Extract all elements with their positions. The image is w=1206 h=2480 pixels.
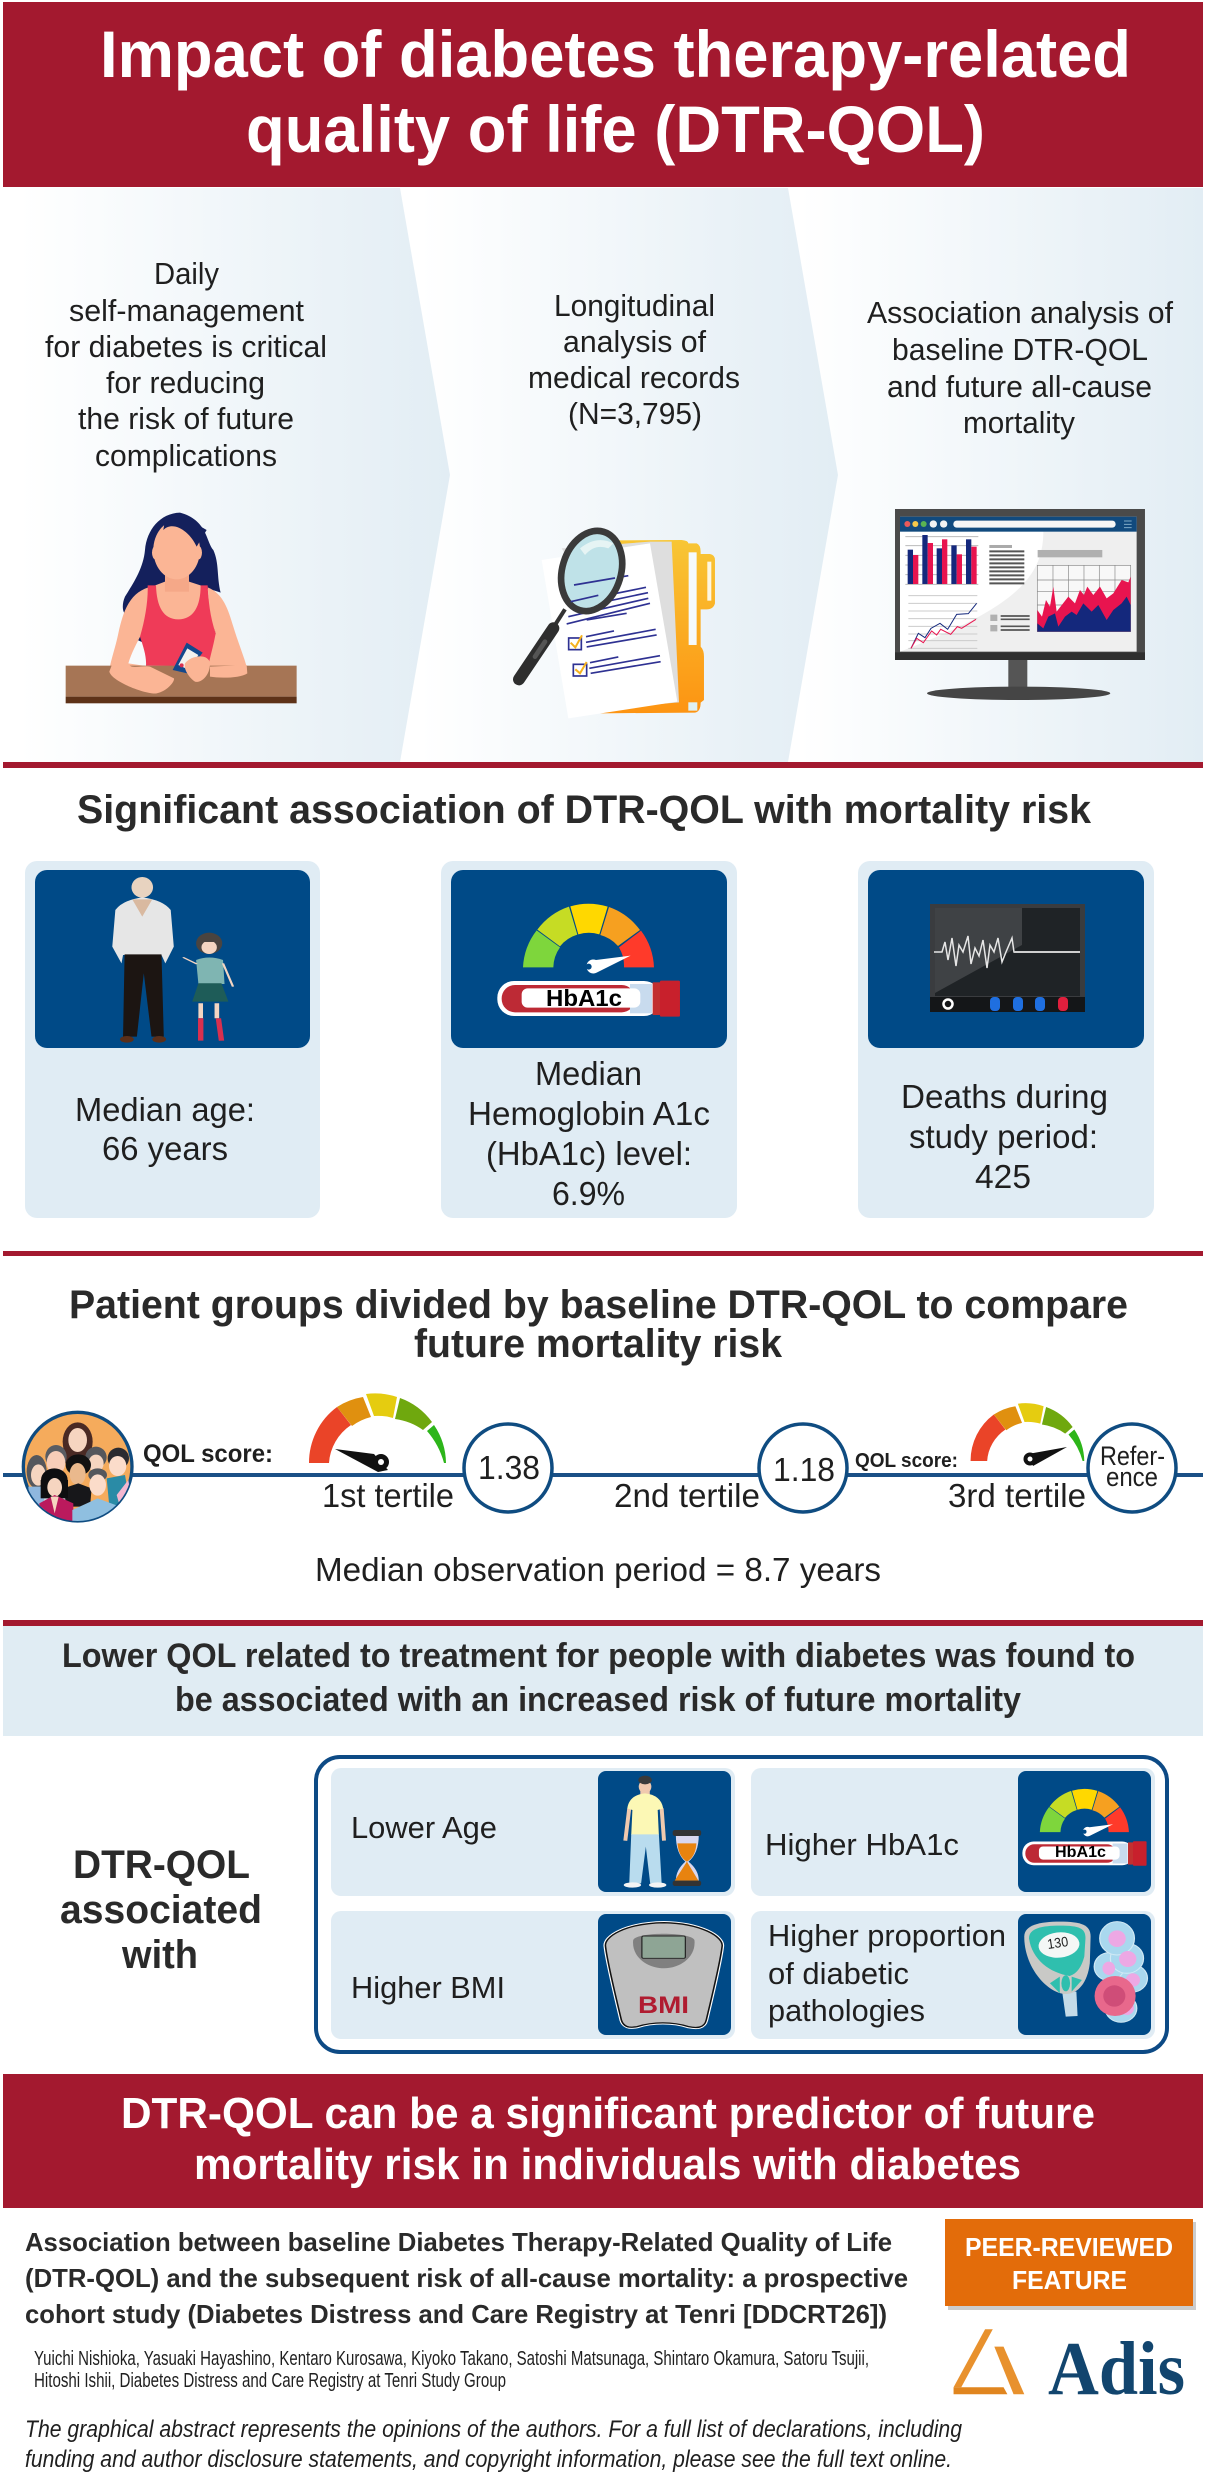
panel: key finding band xyxy=(3,1626,1203,1736)
icon: person and hourglass xyxy=(624,1776,701,1888)
text: article citation: Association between baseline Diabetes Therapy-Related Quality of Life xyxy=(25,2227,892,2257)
text: article citation: cohort study (Diabetes Distress and Care Registry at Tenri [DDCRT26]) xyxy=(25,2299,887,2329)
cell: diabetic pathologies xyxy=(751,1911,1155,2039)
text: association analysis xyxy=(867,295,1173,440)
circle: hazard ratio 1.18 xyxy=(759,1424,847,1512)
label: QOL score left: QOL score: xyxy=(143,1440,273,1468)
text: longitudinal analysis: medical records xyxy=(528,360,740,395)
circle: reference xyxy=(1088,1424,1176,1512)
heading: significant association: Significant association of DTR-QOL with mortality risk xyxy=(77,788,1092,832)
section divider xyxy=(3,1620,1203,1626)
text: association analysis: Association analysis of xyxy=(867,295,1173,330)
label: meter reading: 130 xyxy=(1046,1933,1069,1952)
panel: study overview chevrons xyxy=(3,188,1203,762)
badge: peer-reviewed feature: FEATURE xyxy=(1012,2265,1127,2295)
panel: median HbA1c card xyxy=(441,861,737,1218)
badge: peer-reviewed feature: PEER-REVIEWED xyxy=(965,2232,1173,2262)
cell: diabetic pathologies: of diabetic xyxy=(768,1956,909,1991)
text: median hemoglobin: (HbA1c) level: xyxy=(486,1136,692,1173)
heading: patient groups: Patient groups divided by baseline DTR-QOL to compare xyxy=(69,1283,1128,1327)
text: longitudinal analysis: (N=3,795) xyxy=(568,396,702,431)
text: longitudinal analysis xyxy=(528,288,740,431)
text: daily self-management: Daily xyxy=(154,256,219,291)
panel: key finding band: Lower QOL related to treatment for people with diabetes was found to xyxy=(62,1637,1135,1675)
text: median hemoglobin: Median xyxy=(535,1056,642,1093)
cell: lower age: Lower Age xyxy=(351,1810,497,1845)
icon: gauge needle low xyxy=(335,1449,389,1472)
conclusion banner xyxy=(3,2074,1203,2208)
text: association analysis: and future all-cause xyxy=(887,369,1152,404)
text: article citation xyxy=(25,2227,908,2329)
text: disclaimer: funding and author disclosure statements, and copyright information, please see the full text online. xyxy=(25,2446,952,2473)
text: median hemoglobin: Hemoglobin A1c xyxy=(468,1096,710,1133)
circle: reference: Refer- xyxy=(1100,1441,1165,1471)
text: median hemoglobin xyxy=(468,1056,710,1213)
text: authors xyxy=(34,2348,869,2392)
icon: BMI scale xyxy=(605,1923,722,2028)
text: DTR-QOL associated with xyxy=(60,1843,262,1977)
icon: glucose meter and cells xyxy=(1024,1922,1147,2022)
text: median age: Median age: xyxy=(75,1092,255,1129)
text: association analysis: mortality xyxy=(963,405,1075,440)
circle: hazard ratio 1.38: 1.38 xyxy=(478,1450,540,1487)
text: median hemoglobin: 6.9% xyxy=(552,1176,625,1213)
text: daily self-management: complications xyxy=(95,438,277,473)
cell: higher HbA1c: Higher HbA1c xyxy=(765,1827,959,1862)
chart: tertile timeline xyxy=(3,1393,1203,1523)
label: QOL score right: QOL score: xyxy=(855,1450,958,1472)
circle: hazard ratio 1.18: 1.18 xyxy=(773,1452,835,1489)
section divider xyxy=(3,1251,1203,1256)
text: daily self-management: the risk of future xyxy=(78,401,294,436)
panel: key finding band: be associated with an increased risk of future mortality xyxy=(175,1681,1021,1719)
text: DTR-QOL associated with: with xyxy=(121,1933,198,1977)
text: daily self-management: self-management xyxy=(69,293,304,328)
text: DTR-QOL associated with: DTR-QOL xyxy=(73,1843,250,1887)
label: small HbA1c on tube: HbA1c xyxy=(1055,1844,1106,1861)
circle: reference: ence xyxy=(1106,1462,1158,1492)
icon: heart rate monitor xyxy=(930,904,1085,1012)
panel: associated factors xyxy=(316,1757,1167,2052)
label: 2nd tertile: 2nd tertile xyxy=(614,1478,760,1515)
text: daily self-management: for diabetes is critical xyxy=(45,329,327,364)
conclusion banner: mortality risk in individuals with diabetes xyxy=(194,2140,1021,2189)
title banner: quality of life (DTR-QOL) xyxy=(246,92,985,166)
text: disclaimer xyxy=(25,2416,963,2473)
text: deaths during study: study period: xyxy=(909,1119,1098,1156)
icon: HbA1c gauge and blood tube xyxy=(497,904,680,1017)
text: article citation: (DTR-QOL) and the subsequent risk of all-cause mortality: a prospective xyxy=(25,2263,908,2293)
icon: older man and child xyxy=(112,877,233,1043)
icon: gauge needle high xyxy=(1024,1447,1067,1466)
text: authors: Yuichi Nishioka, Yasuaki Hayashino, Kentaro Kurosawa, Kiyoko Takano, Satoshi Matsunaga, Shintaro Okamura, Satoru Tsujii, xyxy=(34,2348,869,2370)
cell: higher BMI xyxy=(331,1911,735,2039)
logo: Adis: Adis xyxy=(1048,2327,1185,2411)
cell: higher BMI: Higher BMI xyxy=(351,1970,505,2005)
cell: lower age xyxy=(331,1768,735,1896)
icon: woman testing blood glucose xyxy=(66,513,297,703)
icon: small HbA1c gauge xyxy=(1022,1789,1147,1866)
text: deaths during study: 425 xyxy=(975,1159,1031,1196)
cell: higher HbA1c xyxy=(751,1768,1155,1896)
text: median age: 66 years xyxy=(102,1131,228,1168)
text: DTR-QOL associated with: associated xyxy=(60,1888,262,1932)
section divider xyxy=(3,762,1203,768)
label: HbA1c on tube: HbA1c xyxy=(546,985,622,1011)
text: longitudinal analysis: Longitudinal xyxy=(554,288,715,323)
text: authors: Hitoshi Ishii, Diabetes Distress and Care Registry at Tenri Study Group xyxy=(34,2370,506,2392)
text: disclaimer: The graphical abstract represents the opinions of the authors. For a full list of declarations, including xyxy=(25,2416,963,2443)
heading: patient groups xyxy=(69,1283,1128,1366)
heading: patient groups: future mortality risk xyxy=(414,1322,783,1366)
panel: median age card xyxy=(25,861,320,1218)
text: longitudinal analysis: analysis of xyxy=(563,324,706,359)
title banner xyxy=(3,2,1203,187)
circle: hazard ratio 1.38 xyxy=(464,1424,552,1512)
cell: diabetic pathologies: pathologies xyxy=(768,1993,925,2028)
icon: documents and magnifier xyxy=(519,523,715,718)
text: deaths during study xyxy=(901,1079,1108,1196)
icon: computer monitor with charts xyxy=(895,509,1145,700)
label: 3rd tertile: 3rd tertile xyxy=(948,1478,1086,1515)
text: median observation period: Median observation period = 8.7 years xyxy=(315,1552,881,1589)
label: 1st tertile: 1st tertile xyxy=(322,1478,454,1515)
badge: peer-reviewed feature xyxy=(945,2219,1196,2310)
conclusion banner: DTR-QOL can be a significant predictor of future xyxy=(121,2089,1095,2138)
panel: deaths card xyxy=(858,861,1154,1218)
text: daily self-management: for reducing xyxy=(106,365,265,400)
logo: Adis xyxy=(954,2327,1185,2411)
text: daily self-management xyxy=(45,256,327,473)
label: BMI on scale: BMI xyxy=(638,1992,689,2019)
icon: patient group circle xyxy=(23,1412,133,1523)
icon: high QOL gauge xyxy=(971,1403,1084,1461)
text: association analysis: baseline DTR-QOL xyxy=(892,332,1148,367)
text: median age xyxy=(75,1092,255,1168)
title banner: Impact of diabetes therapy-related xyxy=(100,17,1131,91)
icon: low QOL gauge xyxy=(309,1393,446,1463)
cell: diabetic pathologies: Higher proportion xyxy=(768,1918,1006,1953)
text: deaths during study: Deaths during xyxy=(901,1079,1108,1116)
